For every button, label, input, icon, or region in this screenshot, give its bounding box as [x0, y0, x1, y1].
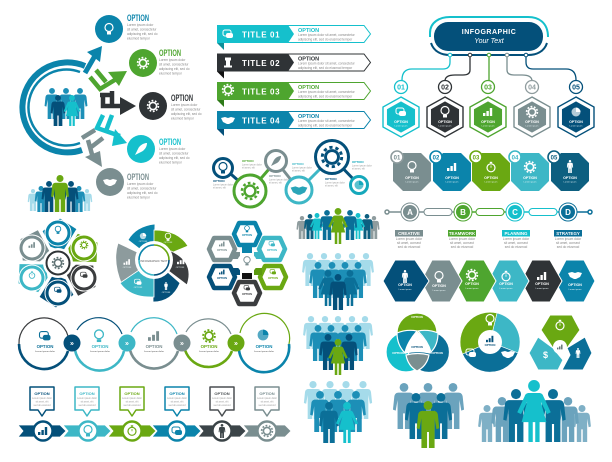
speech box body lines: Lorem ipsum dolor: [257, 397, 277, 400]
label: creative: CREATIVE: [398, 231, 420, 236]
octagon 05: 05: [551, 156, 558, 162]
hex hub: [553, 340, 567, 354]
circle captions: Lorem ipsum dolor: [292, 166, 312, 170]
ring 3: [130, 318, 178, 369]
venn labels: OPTION: [411, 315, 423, 319]
circle captions: OPTION: [292, 162, 304, 166]
ring icons and labels: Lorem ipsum dolor: [144, 351, 164, 353]
hexagon 01: OPTION: [394, 120, 408, 124]
hexagon 02: 02: [441, 84, 449, 92]
curved arcs and blue arrow: [22, 46, 102, 152]
ribbon segments: [18, 425, 291, 437]
octagon 04: 04: [512, 156, 519, 162]
chart: three part donut: [460, 312, 520, 372]
step 5: [521, 260, 562, 302]
node D: [559, 203, 577, 221]
option 4: [127, 135, 190, 164]
joints: »: [234, 340, 238, 348]
hexagon 02: [427, 80, 463, 137]
speech box text: [34, 391, 275, 396]
ribbon 4: Lorem ipsum dolor sit amet, consectetur: [298, 119, 356, 123]
label: planning: [502, 230, 530, 249]
speech box body lines: sit amet, elit: [171, 400, 184, 404]
ribbon 4: adipiscing elit, sed do eiusmod tempor: [298, 124, 353, 128]
hexagon 05: OPTION: [569, 120, 583, 124]
joints: »: [180, 340, 184, 348]
pie labels: OPTION: [123, 267, 132, 269]
speech box body lines: sed do eiusmod: [214, 404, 231, 407]
outer arcs: [430, 17, 548, 55]
ribbon 3: adipiscing elit, sed do eiusmod tempor: [298, 94, 353, 98]
circle icons: [219, 147, 364, 199]
panel: org chart: [383, 17, 594, 137]
ring icons and labels: Lorem ipsum dolor: [199, 351, 219, 353]
speech box body lines: Lorem ipsum dolor: [77, 397, 97, 400]
speech box text: OPTION: [169, 391, 185, 396]
octagon 03: 03: [473, 156, 480, 162]
chart: hexagon ring: [209, 223, 286, 304]
timeline rail: [387, 211, 590, 213]
hexagon 05: [558, 80, 594, 137]
option 3: [139, 92, 202, 120]
octagon 01: [391, 151, 431, 191]
pie labels: OPTION: [176, 267, 185, 269]
ribbon 3: [217, 82, 370, 107]
hexagon 02: Lorem ipsum: [439, 124, 451, 128]
circle captions: sit amet, elit: [325, 184, 338, 188]
header pill: [434, 22, 543, 51]
step 1: [383, 260, 429, 302]
donut segments: [460, 312, 520, 372]
speech box body lines: sit amet, elit: [81, 400, 94, 404]
panel: speech boxes with ribbon: [18, 387, 291, 440]
petal inner discs: [22, 224, 94, 302]
option 1: sit amet, consectetur: [127, 28, 157, 32]
pie labels: [123, 233, 185, 294]
joints: »: [125, 340, 129, 348]
panel: radial arrows with options: [22, 13, 202, 200]
option 5: OPTION: [127, 172, 149, 182]
people group: [45, 88, 87, 126]
node C: C: [512, 208, 518, 217]
option 5: [96, 168, 158, 200]
label: strategy: sit amet, consect: [556, 241, 580, 245]
step 4: [488, 260, 529, 302]
header pill: Your Text: [474, 38, 505, 45]
people group: blue crowd: [302, 253, 374, 310]
connectors: [224, 157, 359, 191]
octagon 04: [509, 151, 549, 191]
people group: green woman leader: [296, 208, 380, 244]
option 2: OPTION: [159, 48, 181, 58]
venn labels: OPTION: [411, 345, 423, 349]
label: creative: [395, 230, 423, 249]
octagon 03: [470, 151, 510, 191]
step 2: [421, 260, 462, 302]
step 3: [455, 260, 496, 302]
hexagon icons and labels: OPTION: [242, 233, 252, 237]
label: strategy: Lorem ipsum dolor: [555, 237, 582, 241]
node A: [401, 203, 419, 221]
rail ends: [385, 210, 592, 214]
ribbon 1: adipiscing elit, sed do eiusmod tempor: [298, 38, 353, 42]
hexagon 03: 03: [484, 84, 492, 92]
node A: A: [407, 208, 413, 217]
venn labels: OPTION: [431, 351, 443, 355]
step 1: Lorem ipsum: [399, 288, 411, 291]
ring 2: [75, 318, 124, 371]
people group: man and cyan woman: [304, 381, 372, 443]
hexagon icons and labels: OPTION: [217, 248, 227, 252]
step 2: OPTION: [432, 284, 446, 288]
step 6: OPTION: [568, 283, 582, 287]
chart: six petal flower: [10, 218, 106, 308]
hexagon 03: [470, 80, 506, 137]
option 2: [129, 48, 190, 77]
ring icons and labels: OPTION: [92, 344, 108, 349]
ribbon 3: TITLE 03: [242, 88, 280, 96]
hexagon icons and labels: OPTION: [267, 248, 277, 252]
option 3: OPTION: [171, 93, 193, 103]
cyan arrow: [97, 115, 127, 146]
octagon 01: Lorem ipsum: [406, 180, 418, 184]
octagon 02: [430, 151, 471, 191]
hexagons: [209, 223, 286, 304]
option 3: eiusmod tempor: [171, 116, 195, 120]
step 2: Lorem ipsum: [433, 289, 445, 292]
ribbon 2: TITLE 02: [242, 59, 280, 68]
circle captions: OPTION: [325, 177, 337, 181]
ring icons and labels: Lorem ipsum dolor: [35, 351, 55, 353]
pie ring: [139, 245, 169, 275]
hexagon 05: 05: [572, 84, 580, 92]
octagon 03: OPTION: [484, 176, 498, 180]
node B: B: [460, 208, 466, 217]
step 3: Lorem ipsum: [466, 287, 478, 290]
label: teamwork: sit amet, consect: [450, 241, 474, 245]
pie labels: OPTION: [139, 241, 148, 243]
speech box text: OPTION: [79, 391, 95, 396]
option 4: OPTION: [159, 137, 181, 147]
speech box body lines: Lorem ipsum dolor: [167, 397, 187, 400]
venn labels: OPTION: [392, 351, 404, 355]
option 1: eiusmod tempor: [127, 36, 151, 40]
ribbon 1: Lorem ipsum dolor sit amet, consectetur: [298, 33, 356, 37]
circle captions: sit amet, elit: [242, 166, 255, 170]
option 2: sit amet, consectetur: [159, 62, 189, 66]
people group: cyan woman leader: [478, 380, 591, 442]
label: planning: PLANNING: [505, 231, 528, 236]
petals: [10, 218, 106, 308]
option 2: adipiscing elit, sed do: [159, 67, 190, 71]
label: planning: sit amet, consect: [504, 241, 528, 245]
circle captions: OPTION: [242, 159, 254, 163]
speech box body lines: sit amet, elit: [126, 400, 139, 404]
circle captions: Lorem ipsum dolor: [325, 182, 345, 184]
ribbon 2: OPTION: [298, 56, 319, 62]
step 6: Lorem ipsum: [569, 288, 581, 291]
octagon 03: Lorem ipsum: [485, 180, 497, 184]
option 3: Lorem ipsum dolor: [171, 103, 198, 107]
hexagon icons and labels: OPTION: [268, 276, 278, 280]
option 5: adipiscing elit, sed do: [127, 191, 158, 195]
step 3: OPTION: [465, 282, 479, 286]
speech box body lines: sed do eiusmod: [79, 404, 96, 407]
hexagon icons and labels: [217, 226, 278, 296]
option 5: eiusmod tempor: [127, 196, 151, 200]
ring 4: [185, 319, 232, 367]
people group: green woman front: [303, 316, 373, 375]
node D: D: [565, 208, 571, 217]
petal icons: [28, 226, 88, 293]
circle captions: Lorem ipsum dolor: [213, 184, 233, 186]
chart: three hexagons: [529, 315, 592, 370]
ribbon 2: [217, 54, 370, 78]
speech box body lines: sit amet, elit: [36, 400, 49, 404]
hex shapes: [529, 315, 592, 370]
speech box body lines: sed do eiusmod: [124, 404, 141, 407]
label: teamwork: sed do eiusmod: [451, 245, 473, 249]
hexagon 02: OPTION: [438, 120, 452, 124]
option 1: [95, 13, 158, 43]
ring icons and labels: OPTION: [201, 344, 217, 349]
pie labels: OPTION: [134, 287, 143, 289]
timeline: A B C D: [385, 203, 592, 249]
speech box body lines: Lorem ipsum dolor: [212, 397, 232, 400]
option 5: sit amet, consectetur: [127, 186, 157, 190]
octagon 04: OPTION: [523, 176, 537, 180]
hexagon icons and labels: OPTION: [217, 276, 227, 280]
ribbon icons: [38, 424, 272, 438]
octagon 01: 01: [394, 156, 401, 162]
joints: [64, 334, 244, 352]
node C: [506, 203, 524, 221]
venn overlaps: [397, 330, 438, 371]
label: creative: sit amet, consect: [397, 241, 421, 245]
step 5: Lorem ipsum: [536, 287, 548, 290]
circle captions: Lorem ipsum dolor: [352, 164, 372, 168]
octagon 02: Lorem ipsum: [446, 180, 458, 184]
circle captions: sit amet, elit: [269, 182, 282, 184]
option 1: adipiscing elit, sed do: [127, 32, 158, 36]
option 2: Lorem ipsum dolor: [159, 58, 186, 62]
octagon 05: OPTION: [563, 176, 577, 180]
pie labels: OPTION: [164, 242, 173, 244]
circle captions: OPTION: [213, 179, 225, 183]
ribbon 3: Lorem ipsum dolor sit amet, consectetur: [298, 90, 356, 94]
pie sectors: [116, 224, 189, 302]
centre hub: [43, 248, 73, 278]
option 3: adipiscing elit, sed do: [171, 112, 202, 116]
ring icons and labels: [35, 330, 274, 353]
panel: linked circles: [213, 140, 372, 207]
label: strategy: sed do eiusmod: [557, 245, 579, 249]
step 6: [555, 260, 595, 302]
hex icons: $: [543, 350, 548, 360]
header pill: INFOGRAPHIC: [462, 29, 516, 36]
step 4: OPTION: [499, 282, 513, 286]
speech box text: OPTION: [259, 391, 275, 396]
connector dots: [448, 53, 528, 57]
ring icons and labels: Lorem ipsum dolor: [254, 351, 274, 353]
ring icons and labels: OPTION: [256, 344, 272, 349]
ribbon 3: OPTION: [298, 85, 319, 91]
ring 5: [239, 313, 290, 372]
option 4: Lorem ipsum dolor: [159, 147, 186, 151]
circle captions: sit amet, elit: [352, 168, 365, 170]
circle captions: Lorem ipsum dolor: [242, 164, 262, 166]
circle captions: OPTION: [352, 160, 364, 164]
ribbon 1: [217, 25, 370, 50]
circle captions: [213, 159, 372, 190]
label: teamwork: TEAMWORK: [449, 231, 476, 236]
speech box body lines: sed do eiusmod: [169, 404, 186, 407]
hexagon 05: Lorem ipsum: [570, 124, 582, 128]
label: planning: Lorem ipsum dolor: [503, 237, 530, 241]
label: teamwork: [448, 230, 476, 249]
circle nodes: [214, 140, 368, 207]
speech box body lines: sit amet, elit: [216, 400, 229, 404]
hexagon icons and labels: OPTION: [242, 292, 252, 296]
option 4: eiusmod tempor: [159, 160, 183, 164]
speech box body lines: Lorem ipsum dolor: [32, 397, 52, 400]
speech box text: OPTION: [34, 391, 50, 396]
speech boxes: [30, 387, 279, 416]
rail pills: [424, 208, 557, 216]
ring icons and labels: OPTION: [37, 344, 53, 349]
step 1: OPTION: [398, 283, 412, 287]
ring icons and labels: OPTION: [146, 344, 162, 349]
option 5: Lorem ipsum dolor: [127, 182, 154, 186]
octagon 01: OPTION: [405, 176, 419, 180]
circle captions: sit amet, elit: [213, 186, 226, 190]
hexagon 01: [383, 80, 419, 137]
label: strategy: [554, 230, 582, 249]
octagon 04: Lorem ipsum: [524, 180, 536, 184]
label: planning: sed do eiusmod: [505, 245, 527, 249]
octagon 02: 02: [433, 156, 440, 162]
speech box body lines: Lorem ipsum dolor: [122, 397, 142, 400]
hexagon 01: Lorem ipsum: [395, 124, 407, 128]
ribbon 2: adipiscing elit, sed do eiusmod tempor: [298, 66, 353, 70]
label: creative: Lorem ipsum dolor: [396, 237, 423, 241]
pie labels: OPTION: [162, 292, 171, 294]
ring icons and labels: Lorem ipsum dolor: [90, 351, 110, 353]
green arrow: [90, 70, 127, 89]
option 4: sit amet, consectetur: [159, 152, 189, 156]
hub: [237, 253, 257, 273]
hexagon 04: OPTION: [525, 120, 539, 124]
speech box text: OPTION: [214, 391, 230, 396]
option 3: sit amet, consectetur: [171, 108, 201, 112]
venn labels: [392, 315, 443, 355]
octagon 02: OPTION: [445, 176, 459, 180]
circle captions: OPTION: [269, 174, 281, 178]
hexagon 03: OPTION: [481, 120, 495, 124]
joints: »: [70, 340, 74, 348]
gray arrow: [82, 130, 103, 167]
people group: green man front: [393, 383, 464, 448]
ribbon 2: Lorem ipsum dolor sit amet, consectetur: [298, 62, 356, 66]
ribbon 4: TITLE 04: [242, 116, 280, 126]
octagon 05: Lorem ipsum: [564, 180, 576, 184]
ring 1: [19, 318, 68, 369]
speech box body lines: sit amet, elit: [261, 400, 274, 404]
hexagon 04: 04: [528, 84, 536, 92]
ribbon discs: [34, 422, 276, 440]
label: creative: sed do eiusmod: [398, 245, 420, 249]
option 1: OPTION: [127, 13, 149, 23]
pie centre text: INFOGRAPHIC TEXT: [140, 259, 168, 263]
venn circles: [386, 313, 450, 372]
people group: green leader: [28, 175, 92, 212]
chart: spiral pie: [116, 224, 189, 302]
label: strategy: STRATEGY: [556, 231, 580, 236]
panel: octagon row: [391, 151, 589, 191]
speech box body lines: [32, 397, 277, 407]
hexagon 04: Lorem ipsum: [526, 124, 538, 128]
ribbon 1: TITLE 01: [242, 30, 280, 40]
speech box text: OPTION: [124, 391, 140, 396]
ribbon 1: OPTION: [298, 28, 319, 34]
hexagon 03: Lorem ipsum: [482, 124, 494, 128]
chart: venn diagram: [386, 313, 450, 372]
ribbon 4: [217, 111, 370, 136]
circle captions: sit amet, elit: [292, 170, 305, 172]
hexagon 01: 01: [397, 84, 405, 92]
octagon 05: [548, 151, 589, 191]
speech box body lines: sed do eiusmod: [259, 404, 276, 407]
speech box body lines: sed do eiusmod: [34, 404, 51, 407]
node B: [454, 203, 472, 221]
panel: title ribbons: [217, 25, 370, 136]
joints: [232, 247, 262, 279]
connectors: [402, 55, 576, 81]
donut icons: [466, 314, 515, 358]
label: teamwork: Lorem ipsum dolor: [449, 237, 476, 241]
ribbon 4: OPTION: [298, 114, 319, 120]
panel: chained circles: [19, 313, 290, 372]
donut hub: OPTION: [485, 343, 495, 347]
step 5: OPTION: [535, 282, 549, 286]
dark arrow: [100, 91, 136, 115]
panel: overlapping hexagon row: [383, 260, 595, 302]
circle captions: Lorem ipsum dolor: [269, 178, 289, 182]
hexagon 04: [514, 80, 550, 137]
pie centre: [135, 241, 173, 279]
option 2: eiusmod tempor: [159, 72, 183, 76]
step 4: Lorem ipsum: [500, 287, 512, 290]
option 1: Lorem ipsum dolor: [127, 23, 154, 27]
option 4: adipiscing elit, sed do: [159, 156, 190, 160]
